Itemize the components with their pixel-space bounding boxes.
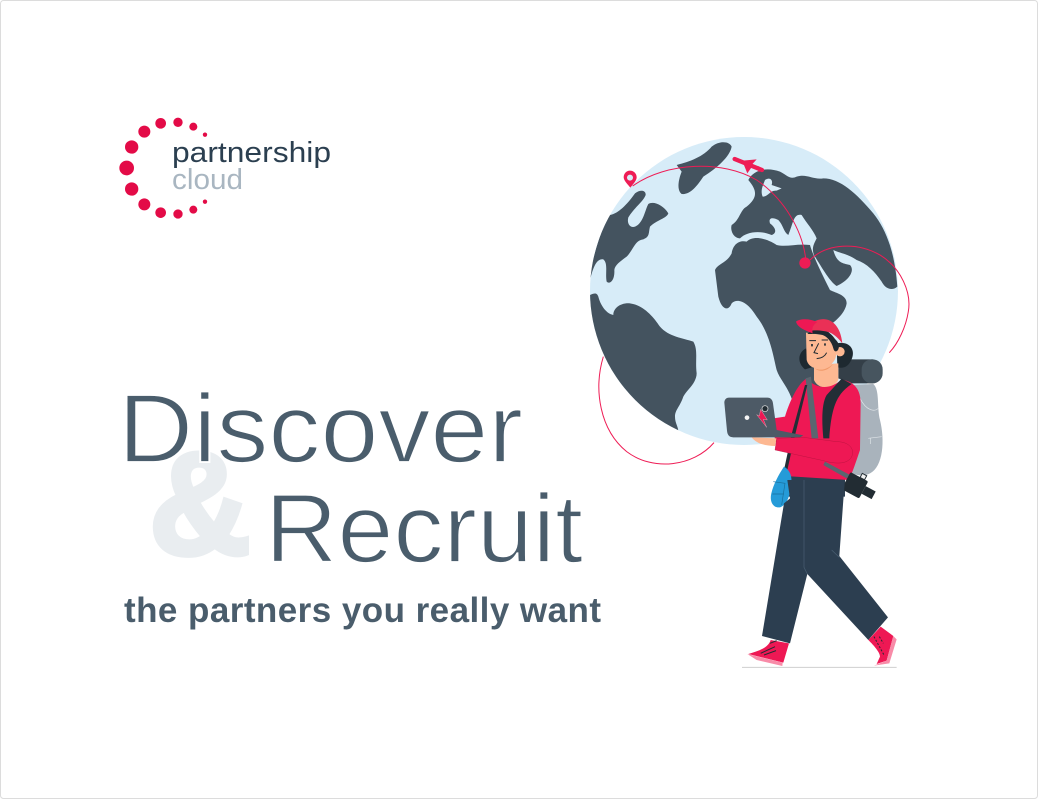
illustration: traveller lower body: [742, 480, 897, 667]
camera: [841, 468, 880, 504]
airplane: [735, 159, 764, 173]
title: Recruit: Recruit: [265, 474, 583, 583]
logo: partnership cloud: [119, 118, 331, 219]
flight routes: [599, 166, 909, 464]
hand: [752, 437, 777, 446]
trouser seam: [804, 480, 839, 574]
face: [809, 340, 828, 359]
location pin: [624, 171, 637, 188]
chin shadow: [815, 363, 834, 371]
decorative ampersand: &: [149, 422, 251, 585]
logo sub-word: cloud: [172, 164, 243, 196]
camera strap: [806, 377, 850, 478]
backpack: [847, 384, 883, 475]
globe ocean: [590, 137, 898, 445]
shoulder strap: [822, 379, 852, 438]
bedroll: [838, 359, 883, 383]
cap: [796, 319, 842, 343]
trousers: [762, 480, 888, 643]
eyes: [812, 343, 825, 346]
subtitle: the partners you really want: [124, 591, 601, 630]
forearm: [775, 437, 853, 463]
illustration: traveller upper body: [724, 319, 883, 507]
neck: [814, 363, 838, 387]
illustration: globe with routes: [580, 137, 909, 464]
shoulder bag: [771, 467, 791, 507]
continents: [580, 142, 897, 450]
bag strap: [784, 385, 807, 470]
ground line: [742, 666, 897, 669]
shirt: [773, 378, 861, 480]
hair front: [807, 330, 839, 351]
laptop: [724, 398, 803, 437]
route origin dot: [799, 257, 811, 269]
trousers top: [785, 473, 845, 497]
right shoe: [868, 627, 897, 666]
left shoe: [747, 640, 789, 666]
head: [806, 333, 845, 369]
hair back: [799, 343, 853, 369]
logo dot ring: [119, 118, 207, 219]
logo wordmark: partnership: [172, 137, 331, 169]
title: Discover: Discover: [118, 374, 523, 483]
